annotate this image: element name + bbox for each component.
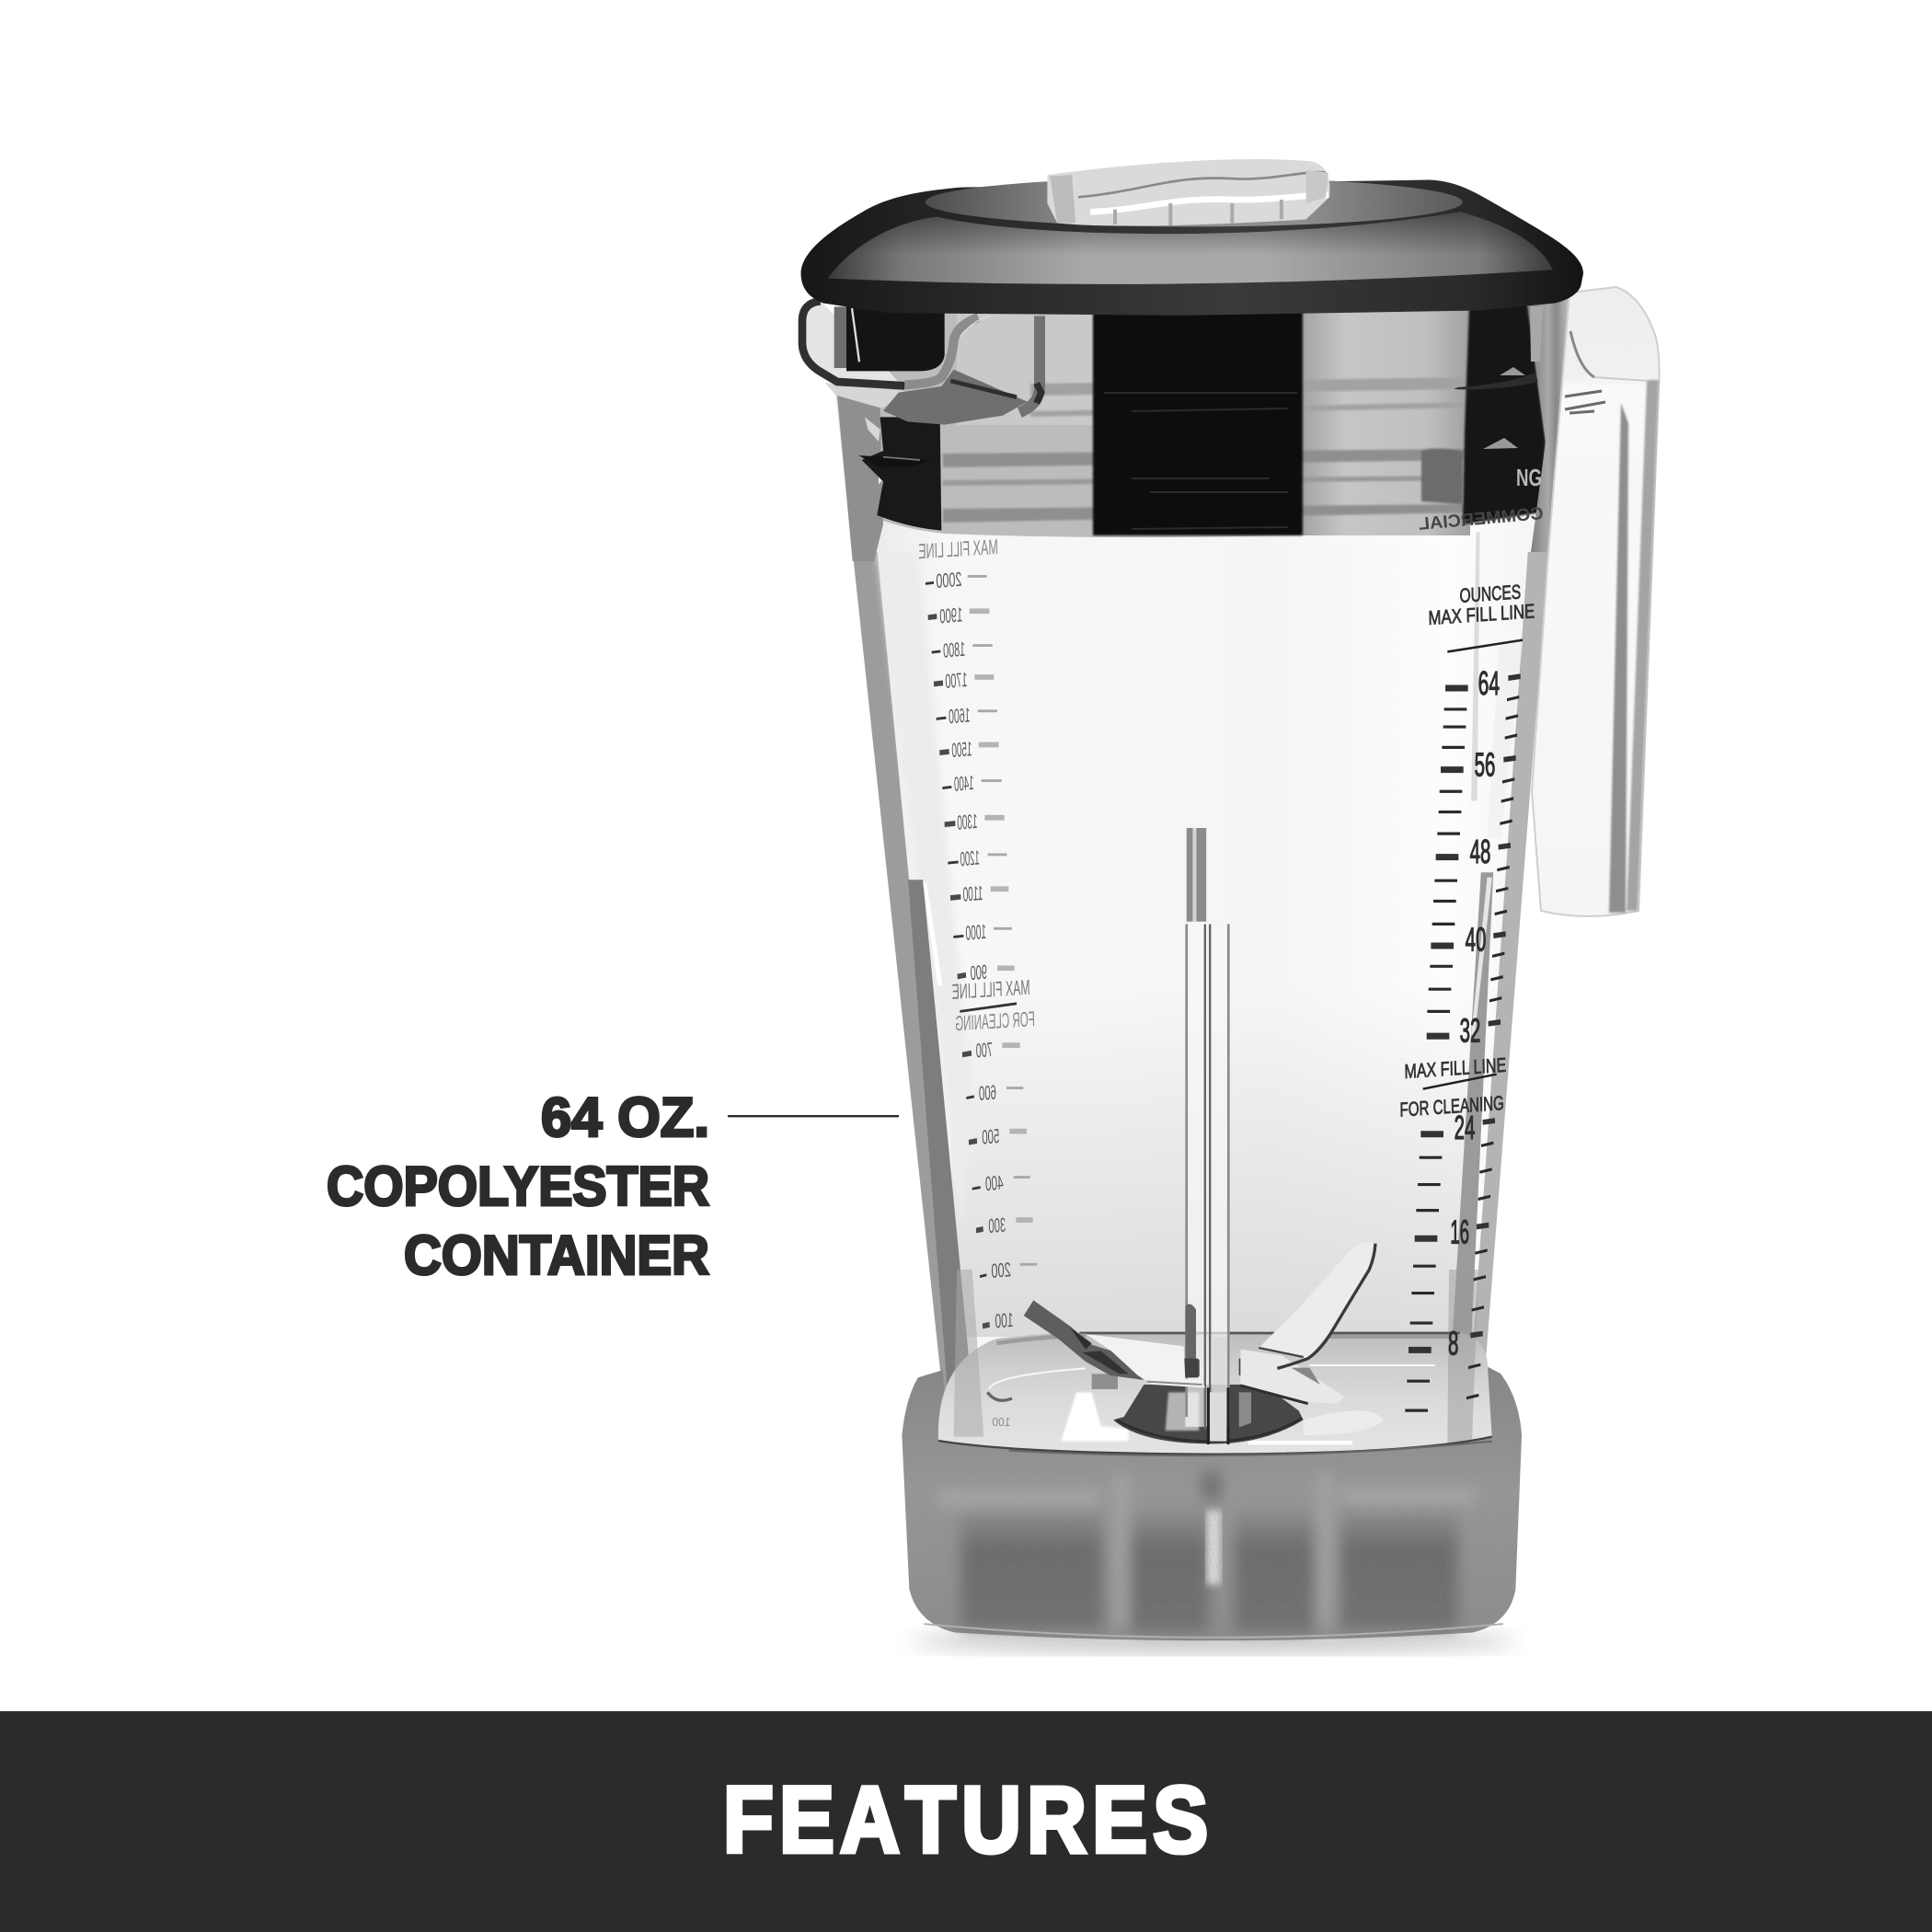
right ounces scale: 24 — [1455, 1110, 1475, 1147]
callout text: 64 OZ. — [541, 1087, 709, 1148]
right ounces scale: 32 — [1460, 1013, 1480, 1050]
lid — [801, 178, 1583, 316]
right ounces scale: 16 — [1450, 1214, 1469, 1251]
right ounces scale — [1399, 580, 1535, 1410]
blades — [1024, 1242, 1375, 1444]
right ounces scale: MAX FILL LINE — [1428, 599, 1535, 629]
left millilitre scale (mirrored through the jar): 1400 — [954, 771, 974, 796]
jar body and walls — [835, 295, 1562, 1442]
left millilitre scale (mirrored through the jar): FOR CLEANING — [955, 1006, 1035, 1035]
rubber base — [902, 1365, 1522, 1653]
left millilitre scale (mirrored through the jar): 1600 — [949, 704, 971, 728]
callout leader line — [728, 1115, 899, 1117]
left millilitre scale (mirrored through the jar): 1100 — [962, 881, 983, 906]
left millilitre scale (mirrored through the jar): MAX FILL LINE — [918, 535, 998, 563]
handle — [1532, 287, 1660, 916]
lid collar and inner cylinder — [851, 293, 1569, 552]
footer heading: FEATURES — [723, 1768, 1208, 1872]
blade hub — [1113, 1385, 1304, 1443]
jar right wall — [1527, 293, 1569, 552]
left millilitre scale (mirrored through the jar): 400 — [985, 1171, 1004, 1195]
left millilitre scale (mirrored through the jar): 100 — [995, 1308, 1014, 1332]
left millilitre scale (mirrored through the jar): 600 — [979, 1081, 996, 1105]
left millilitre scale (mirrored through the jar): 900 — [970, 960, 987, 984]
scale number 2000: 2000 — [936, 568, 962, 592]
left millilitre scale (mirrored through the jar) — [918, 535, 1037, 1332]
left millilitre scale (mirrored through the jar): 1300 — [957, 810, 978, 834]
brand plate — [1421, 449, 1463, 504]
left millilitre scale (mirrored through the jar): 1200 — [960, 846, 980, 870]
centre dark pillar — [1093, 309, 1303, 535]
left millilitre scale (mirrored through the jar): 1900 — [939, 604, 963, 627]
lid collar and inner cylinder: COMMERCIAL — [1418, 504, 1544, 535]
scale number 64: 64 — [1478, 666, 1500, 703]
callout text: COPOLYESTER — [327, 1156, 709, 1217]
right ounces scale: MAX FILL LINE — [1404, 1053, 1506, 1083]
right ounces scale: 56 — [1475, 747, 1495, 784]
callout text: CONTAINER — [404, 1225, 709, 1286]
pour spout — [802, 301, 1041, 561]
left millilitre scale (mirrored through the jar): 700 — [975, 1038, 993, 1062]
jar floor — [938, 1270, 1492, 1455]
left millilitre scale (mirrored through the jar): 1700 — [945, 668, 968, 693]
measuring-cup bands — [943, 377, 1472, 523]
shaft — [1185, 828, 1230, 1430]
left millilitre scale (mirrored through the jar): 500 — [982, 1124, 1000, 1149]
left millilitre scale (mirrored through the jar): 1500 — [951, 738, 972, 762]
right ounces scale: 8 — [1448, 1326, 1458, 1363]
lid collar and inner cylinder: NG — [1516, 464, 1542, 491]
footer band — [0, 1711, 1932, 1932]
blender jar illustration — [801, 159, 1660, 1653]
jar floor: 100 — [992, 1416, 1010, 1429]
left millilitre scale (mirrored through the jar): 1000 — [965, 920, 986, 945]
label ounces: OUNCES — [1459, 580, 1521, 607]
callout text — [327, 1087, 709, 1286]
left millilitre scale (mirrored through the jar): 300 — [988, 1213, 1006, 1237]
right ounces scale: 48 — [1470, 834, 1490, 871]
right ounces scale: FOR CLEANING — [1399, 1091, 1504, 1121]
lid plug — [1047, 159, 1329, 226]
right ounces scale: 40 — [1466, 922, 1486, 959]
left millilitre scale (mirrored through the jar): 200 — [991, 1259, 1011, 1282]
callout: container label — [327, 1087, 899, 1286]
left millilitre scale (mirrored through the jar): MAX FILL LINE — [951, 975, 1030, 1004]
right dark pillar — [1463, 302, 1546, 524]
left millilitre scale (mirrored through the jar): 1800 — [943, 638, 965, 662]
